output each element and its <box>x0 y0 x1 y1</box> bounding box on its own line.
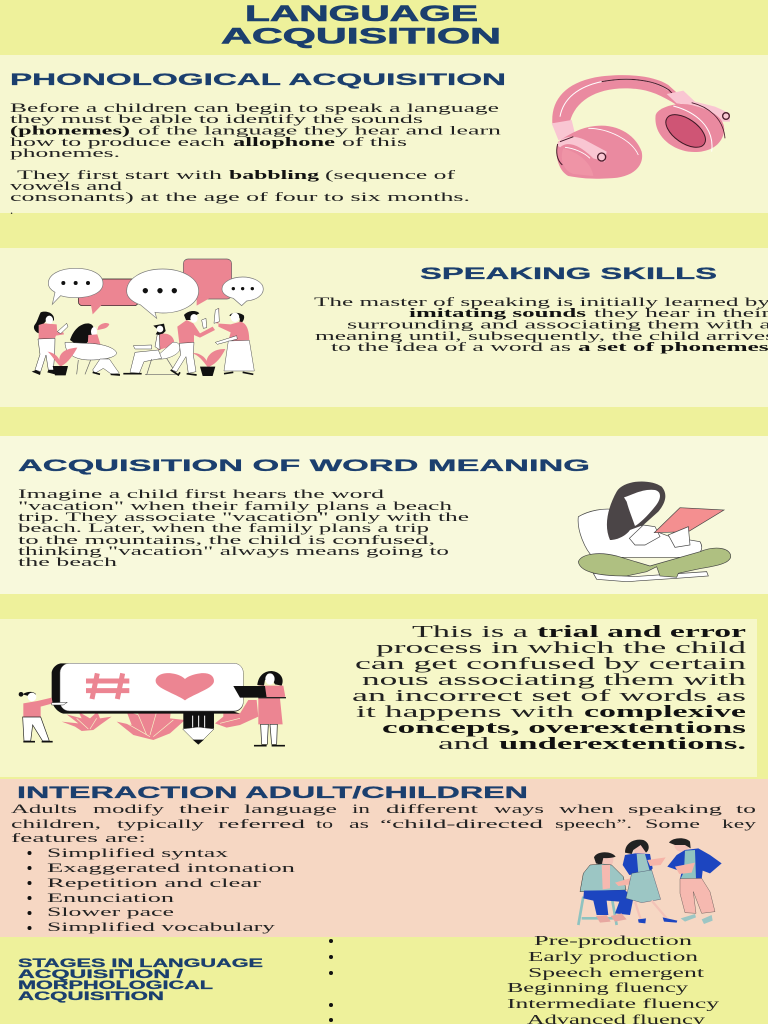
text block: speaking skills: meaning until, subsequently, the child arrives <box>315 329 768 343</box>
heading: interaction adult/children: INTERACTION ADULT/CHILDREN <box>17 784 528 802</box>
icon: headphones <box>552 75 730 179</box>
text block: speaking skills <box>314 295 768 354</box>
icon: plant right <box>193 349 225 376</box>
icon: girl reading a book <box>578 481 731 582</box>
list: stages: Speech emergent <box>528 965 704 980</box>
text block: trial and error: nous associating them with <box>362 670 747 689</box>
title: ACQUISITION <box>221 24 501 48</box>
text block: trial and error: concepts, overextentions <box>382 718 747 737</box>
text block: trial and error: complexive <box>584 702 747 721</box>
person: woman with long skirt <box>214 308 254 374</box>
person: seated man <box>123 324 180 375</box>
text block: phonemes: of this <box>342 135 407 149</box>
person: seated man <box>578 852 638 925</box>
text block: child-directed speech: key <box>722 817 757 831</box>
text block: speaking skills: imitating sounds <box>409 306 586 320</box>
text block: vacation example: to the mountains, the child is confused, <box>18 533 435 547</box>
panel: trial and error <box>0 619 757 777</box>
text block: trial and error: process in which the child <box>376 638 747 657</box>
list: key features: Exaggerated intonation <box>47 861 296 875</box>
text block: vacation example: "vacation" when their family plans a beach <box>18 499 453 513</box>
person: woman <box>623 840 677 923</box>
person: seated woman and table <box>65 323 120 375</box>
text block: vacation example: trip. They associate "vacation" only with the <box>18 510 470 524</box>
icon: three people reading <box>578 838 722 925</box>
text block: child-directed speech: features are: <box>11 831 146 845</box>
person: standing man <box>171 311 215 375</box>
heading: acquisition of word meaning: ACQUISITION OF WORD MEANING <box>18 457 590 475</box>
icon: people talking with speech bubbles <box>32 259 263 376</box>
text block: vacation example: the beach <box>18 555 118 569</box>
text block: phonemes: they must be able to identify the sounds <box>10 112 423 126</box>
text block: child-directed speech: their <box>179 802 231 816</box>
text block: phonemes: (phonemes) <box>10 124 130 138</box>
icon: pencil <box>183 713 214 728</box>
text block: child-directed speech: to <box>316 817 333 831</box>
title <box>221 1 501 48</box>
text block: babbling: consonants) at the age of four to six months. <box>10 190 470 204</box>
list: stages: Beginning fluency <box>507 980 688 995</box>
text block: child-directed speech: ways <box>494 802 544 816</box>
text block: phonemes <box>10 101 502 160</box>
panel: speaking skills <box>0 248 768 407</box>
text block: child-directed speech: Some <box>645 817 701 831</box>
text block: trial and error: can get confused by certain <box>355 654 747 673</box>
list: key features: Enunciation <box>47 891 175 905</box>
text block: phonemes: Before a children can begin to speak a language <box>10 101 500 115</box>
text block: trial and error: trial and error <box>537 622 747 641</box>
icon: centre plant <box>117 702 185 740</box>
text block: babbling: They first start with <box>17 168 223 182</box>
icon: heart <box>156 673 214 700</box>
list: stages: Early production <box>528 949 698 964</box>
text block: child-directed speech: Adults <box>11 802 77 816</box>
text block: vacation example: thinking "vacation" always means going to <box>18 544 449 558</box>
list: stages: Pre-production <box>534 933 692 948</box>
text block: child-directed speech: when <box>559 802 615 816</box>
text block: trial and error: an incorrect set of words as <box>352 686 746 705</box>
list: stages <box>329 933 719 1024</box>
text block: trial and error: underextentions. <box>499 734 746 753</box>
text block: trial and error: it happens with <box>356 702 575 721</box>
text block: child-directed speech: referred <box>218 817 307 831</box>
person: woman with laptop <box>233 671 286 746</box>
list: key features: Simplified syntax <box>47 846 229 860</box>
heading: stages: ACQUISITION / <box>18 969 185 981</box>
text block: child-directed speech: children, <box>11 817 101 831</box>
panel: phonological acquisition <box>0 55 768 217</box>
icon: hashtag <box>86 673 129 699</box>
text block: child-directed speech: typically <box>117 817 205 831</box>
text block: babbling: vowels and <box>10 179 123 193</box>
person: standing man <box>667 838 722 924</box>
heading: stages: ACQUISITION <box>18 991 164 1003</box>
text block: child-directed speech: to <box>736 802 756 816</box>
list: key features <box>28 846 296 934</box>
person: woman pointing <box>19 692 67 742</box>
text block: babbling <box>10 168 470 217</box>
heading: stages: STAGES IN LANGUAGE <box>18 958 264 970</box>
text block: speaking skills: The master of speaking is initially learned by <box>314 295 768 309</box>
text block: babbling: (sequence of <box>325 168 457 182</box>
text block: vacation example: Imagine a child first hears the word <box>18 487 385 501</box>
text block: babbling: . <box>10 203 13 217</box>
heading: phonological acquisition: PHONOLOGICAL ACQUISITION <box>10 71 506 89</box>
text block: child-directed speech: as <box>349 817 369 831</box>
text block: child-directed speech: modify <box>93 802 165 816</box>
text block: child-directed speech: “child-directed <box>380 817 544 831</box>
text block: child-directed speech: language <box>244 802 338 816</box>
text block: speaking skills: they hear in their <box>594 306 768 320</box>
list: key features: Slower pace <box>47 905 175 919</box>
text block: phonemes: allophone <box>233 135 336 149</box>
text block: trial and error: and <box>438 734 490 753</box>
panel: stages in language acquisition <box>0 933 768 1024</box>
icon: left plant <box>62 712 112 731</box>
text block: child-directed speech <box>11 802 757 845</box>
text block: child-directed speech: speaking <box>628 802 723 816</box>
text block: phonemes: phonemes. <box>10 146 120 160</box>
text block: speaking skills: surrounding and associating them with a <box>347 318 768 332</box>
text block: phonemes: how to produce each <box>10 135 226 149</box>
text block: speaking skills: a set of phonemes. <box>578 340 768 354</box>
panel: interaction adult/children <box>0 779 768 937</box>
board <box>52 663 243 714</box>
text block: child-directed speech: different <box>386 802 479 816</box>
person: standing woman left <box>32 312 68 375</box>
text block: trial and error: This is a <box>412 622 529 641</box>
text block: vacation example: beach. Later, when the family plans a trip <box>18 521 429 535</box>
panel: acquisition of word meaning <box>0 436 768 594</box>
list: stages: Intermediate fluency <box>507 996 719 1011</box>
heading: speaking skills: SPEAKING SKILLS <box>420 265 717 283</box>
list: key features: Simplified vocabulary <box>47 920 276 934</box>
text block: speaking skills: to the idea of a word as <box>331 340 571 354</box>
text block: trial and error <box>352 622 747 753</box>
text block: child-directed speech: in <box>352 802 371 816</box>
heading: stages <box>18 958 264 1003</box>
text block: vacation example <box>18 487 470 569</box>
text block: babbling: babbling <box>229 168 320 182</box>
icon: social media board with pencil <box>52 663 258 745</box>
text block: phonemes: of the language they hear and learn <box>138 124 502 138</box>
icon: right plant <box>215 700 258 728</box>
title: LANGUAGE <box>245 1 478 26</box>
heading: stages: MORPHOLOGICAL <box>18 980 213 992</box>
list: key features: Repetition and clear <box>47 876 263 890</box>
text block: child-directed speech: speech”. <box>555 817 632 831</box>
icon: plant left <box>47 348 77 375</box>
